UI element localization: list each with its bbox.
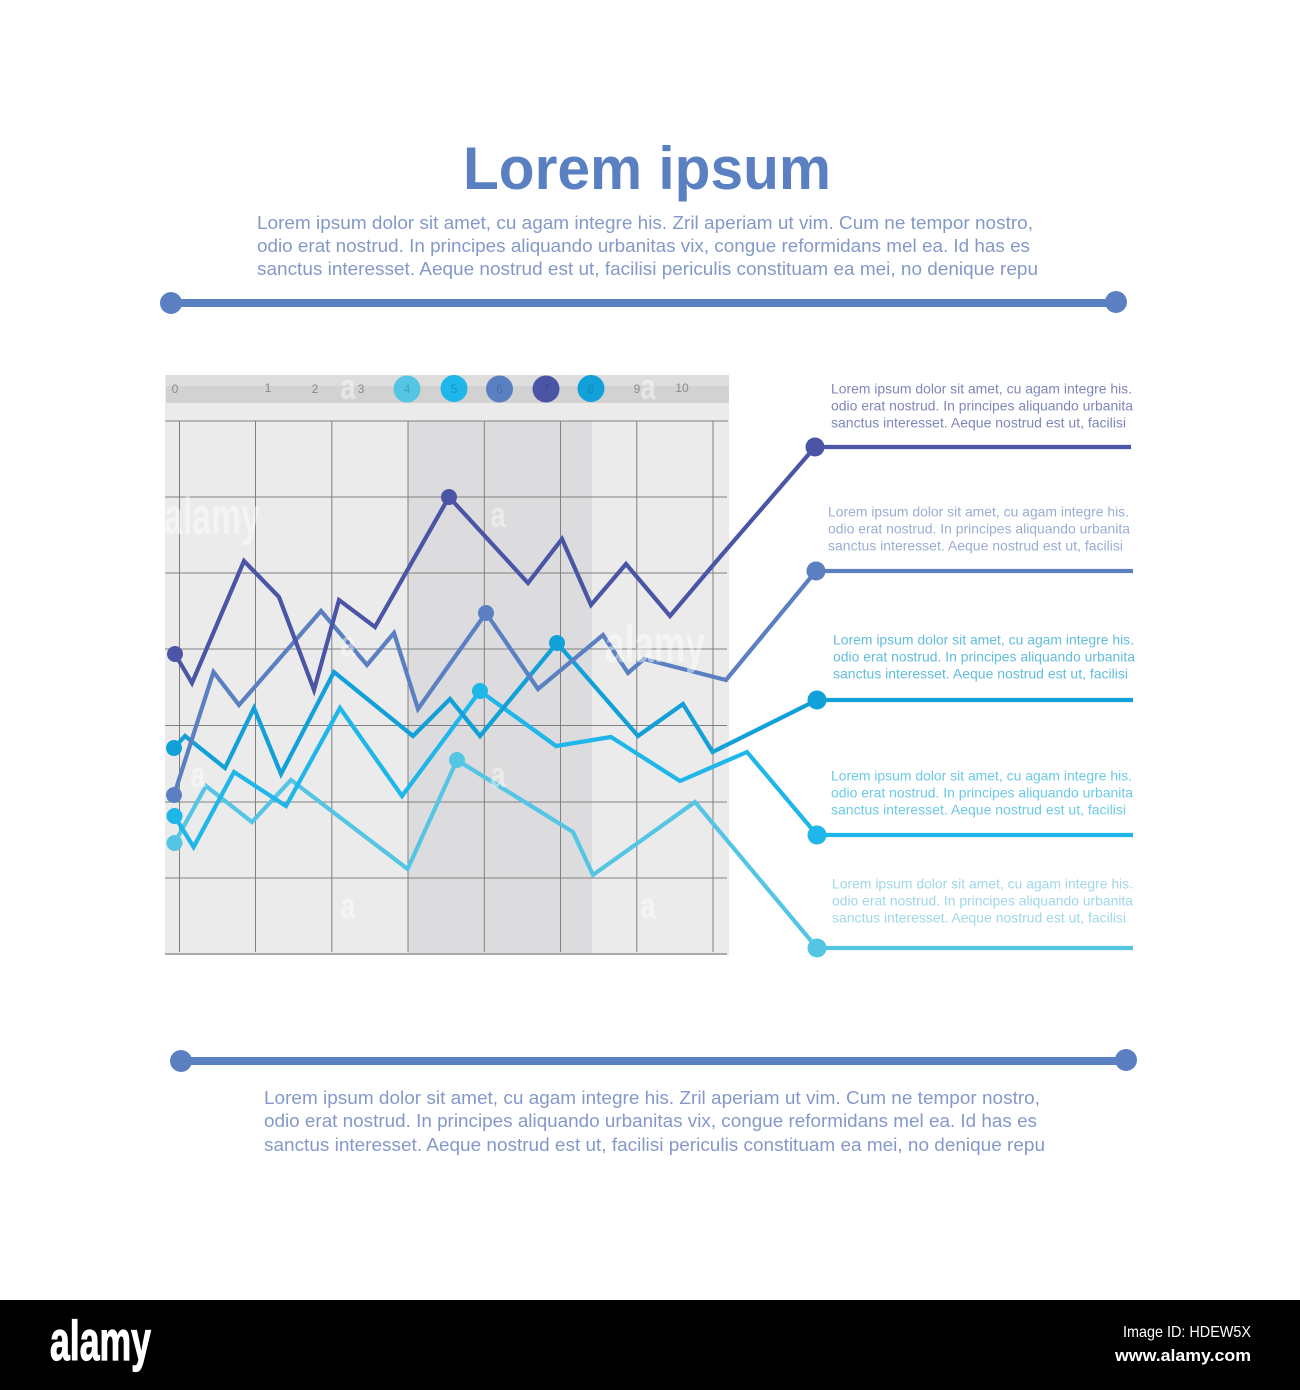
callout text: deep cyan: Lorem ipsum dolor sit amet, cu agam integre his. <box>833 632 1134 648</box>
callout text: mid blue: Lorem ipsum dolor sit amet, cu agam integre his. <box>828 504 1129 520</box>
callout text: deep cyan <box>833 632 1135 682</box>
axis numbers <box>172 381 689 396</box>
watermarks: alamy <box>605 616 705 674</box>
watermarks: a <box>490 494 506 535</box>
intro text block: Lorem ipsum dolor sit amet, cu agam integre his. Zril aperiam ut vim. Cum ne tempor nostro, <box>257 213 1033 233</box>
callout text: light cyan: Lorem ipsum dolor sit amet, cu agam integre his. <box>832 876 1133 892</box>
callout text: cyan <box>831 768 1133 818</box>
callout text: cyan: sanctus interesset. Aeque nostrud est ut, facilisi <box>831 802 1126 818</box>
watermarks: a <box>640 366 656 407</box>
legend circles: 5 <box>451 382 458 396</box>
axis numbers: 9 <box>634 382 641 396</box>
grid <box>165 421 728 954</box>
axis numbers: 1 <box>265 381 272 395</box>
watermarks: alamy <box>164 488 260 546</box>
watermarks: a <box>340 885 356 926</box>
intro text block: sanctus interesset. Aeque nostrud est ut, facilisi periculis constituam ea mei, no denique repu <box>257 259 1038 279</box>
axis numbers: 0 <box>172 382 179 396</box>
footer text block: Lorem ipsum dolor sit amet, cu agam integre his. Zril aperiam ut vim. Cum ne tempor nostro, <box>264 1088 1040 1108</box>
watermarks <box>164 366 705 926</box>
callout text: dark indigo: Lorem ipsum dolor sit amet, cu agam integre his. <box>831 380 1132 396</box>
footer text block: sanctus interesset. Aeque nostrud est ut, facilisi periculis constituam ea mei, no denique repu <box>264 1135 1045 1155</box>
line series: light cyan <box>166 752 1133 958</box>
intro text block <box>257 213 1038 279</box>
watermarks: a <box>340 366 356 407</box>
black credit bar <box>0 1300 1300 1390</box>
axis numbers: 3 <box>358 382 365 396</box>
callout text: mid blue <box>828 504 1130 554</box>
watermarks: a <box>190 754 206 795</box>
chart panel <box>164 366 1133 958</box>
bottom divider <box>170 1049 1137 1072</box>
legend circles: 6 <box>496 382 503 396</box>
top divider <box>160 291 1127 314</box>
image id: Image ID: HDEW5X <box>1123 1324 1251 1341</box>
title: Lorem ipsum <box>463 135 831 202</box>
callout text: light cyan: sanctus interesset. Aeque nostrud est ut, facilisi <box>832 910 1126 926</box>
panel background <box>165 375 729 955</box>
chart header band <box>166 375 729 403</box>
legend circles <box>394 375 604 402</box>
watermarks: a <box>340 623 356 664</box>
footer text block: odio erat nostrud. In principes aliquando urbanitas vix, congue reformidans mel ea. Id has es <box>264 1111 1037 1131</box>
line series: deep cyan <box>166 635 1133 774</box>
callout text: mid blue: odio erat nostrud. In principes aliquando urbanita <box>828 520 1130 536</box>
callout text: dark indigo: odio erat nostrud. In principes aliquando urbanita <box>831 398 1133 414</box>
line series: dark indigo <box>167 438 1131 690</box>
callout text: mid blue: sanctus interesset. Aeque nostrud est ut, facilisi <box>828 538 1123 554</box>
callout text: dark indigo: sanctus interesset. Aeque nostrud est ut, facilisi <box>831 414 1126 430</box>
highlighted column <box>408 421 592 954</box>
intro text block: odio erat nostrud. In principes aliquando urbanitas vix, congue reformidans mel ea. Id has es <box>257 236 1030 256</box>
axis numbers: 10 <box>675 381 689 395</box>
callout text: deep cyan: sanctus interesset. Aeque nostrud est ut, facilisi <box>833 666 1128 682</box>
callout text: light cyan: odio erat nostrud. In principes aliquando urbanita <box>832 892 1133 908</box>
callout text: dark indigo <box>831 380 1133 430</box>
legend circles: 8 <box>588 382 595 396</box>
legend circles: 7 <box>543 382 550 396</box>
legend circles: 4 <box>404 382 411 396</box>
axis numbers: 2 <box>312 382 319 396</box>
line series: cyan <box>166 683 1133 847</box>
callout text: cyan: Lorem ipsum dolor sit amet, cu agam integre his. <box>831 768 1132 784</box>
watermarks: a <box>640 885 656 926</box>
watermarks: a <box>490 754 506 795</box>
site address: www.alamy.com <box>1114 1346 1251 1365</box>
logo: alamy <box>50 1309 151 1372</box>
callout text: light cyan <box>832 876 1133 926</box>
footer text block <box>264 1088 1045 1155</box>
line series: mid blue <box>166 562 1133 803</box>
callout text: cyan: odio erat nostrud. In principes aliquando urbanita <box>831 784 1133 800</box>
callout text: deep cyan: odio erat nostrud. In principes aliquando urbanita <box>833 648 1135 664</box>
